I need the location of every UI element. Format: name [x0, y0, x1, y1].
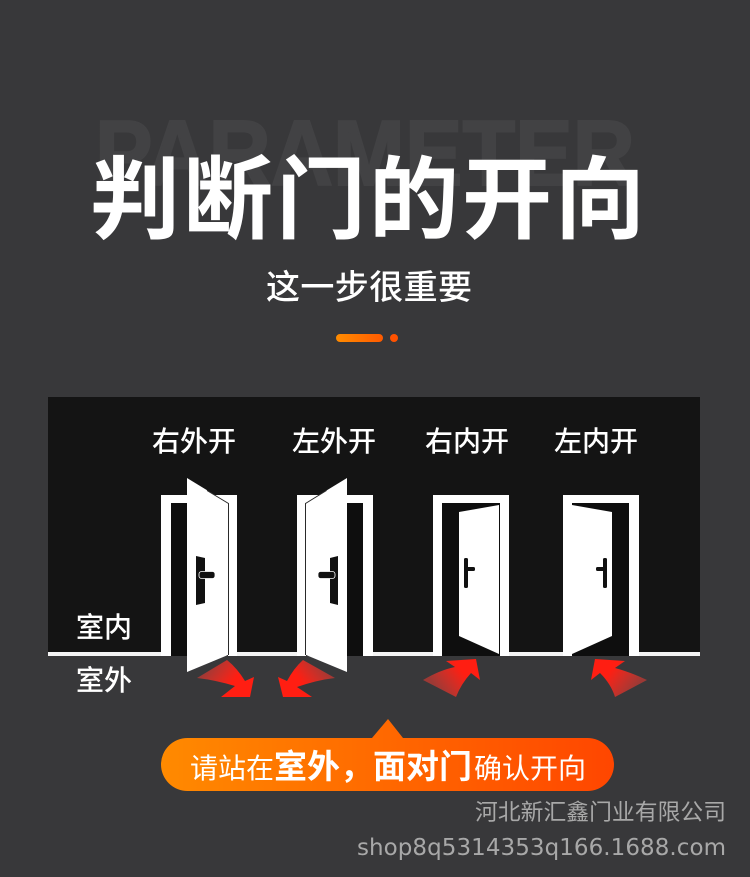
company name: 河北新汇鑫门业有限公司 — [475, 799, 726, 825]
label: outdoors: 室外 — [76, 665, 132, 696]
door: right inward — [433, 495, 509, 656]
accent dash and dot — [336, 334, 398, 342]
arrow: right outward — [197, 660, 254, 697]
callout — [161, 719, 614, 791]
callout text: 请站在室外，面对门确认开向 — [190, 748, 586, 785]
floor line — [48, 652, 700, 656]
arrow: right inward — [423, 659, 480, 697]
subtitle: 这一步很重要 — [266, 269, 472, 307]
label: left outward: 左外开 — [292, 426, 376, 457]
panel: door diagram — [48, 397, 700, 672]
title: 判断门的开向 — [90, 151, 645, 251]
label: indoors: 室内 — [76, 612, 132, 643]
door: left outward — [297, 478, 373, 672]
arrow: left outward — [278, 660, 335, 697]
ghost word: PARAMETER: PARAMETER — [95, 101, 635, 205]
label: right inward: 右内开 — [425, 426, 509, 457]
door: left inward — [563, 495, 639, 656]
shop url: shop8q5314353q166.1688.com — [357, 835, 726, 861]
label: left inward: 左内开 — [554, 426, 638, 457]
label: right outward: 右外开 — [152, 426, 236, 457]
arrow: left inward — [591, 659, 647, 697]
door: right outward — [161, 478, 237, 672]
